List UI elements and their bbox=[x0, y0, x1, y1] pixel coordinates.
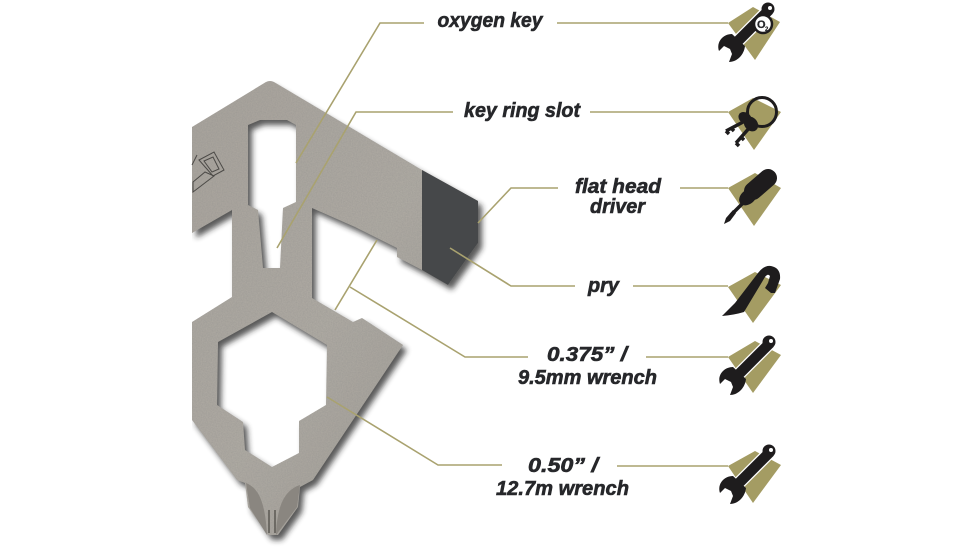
icon: 0.50 wrench bbox=[719, 444, 781, 504]
left crop mask bbox=[150, 60, 192, 460]
label: 0.50 wrench: 12.7m wrench bbox=[496, 478, 629, 500]
leader lines bbox=[277, 23, 728, 466]
icon: pry bar bbox=[722, 266, 781, 323]
icon: 0.375 wrench bbox=[719, 336, 781, 395]
icon: oxygen wrench bbox=[718, 2, 780, 62]
dark blade tip bbox=[422, 170, 478, 285]
tool body bbox=[192, 81, 478, 535]
label: pry: pry bbox=[587, 275, 620, 297]
icon: keys and ring bbox=[726, 98, 781, 150]
label: flat head driver: driver bbox=[590, 196, 646, 218]
label: 0.375 wrench: 0.375” / bbox=[547, 344, 630, 366]
icon: oxygen wrench: 2 bbox=[765, 27, 769, 33]
icon: screwdriver bbox=[724, 173, 781, 226]
label: oxygen key: oxygen key bbox=[438, 10, 543, 32]
icon: oxygen wrench: O bbox=[757, 19, 766, 31]
label: key ring slot: key ring slot bbox=[464, 100, 581, 122]
label: flat head driver: flat head bbox=[575, 176, 662, 198]
label: 0.50 wrench: 0.50” / bbox=[528, 455, 601, 477]
label: 0.375 wrench: 9.5mm wrench bbox=[518, 367, 657, 389]
logo mark bbox=[192, 152, 224, 192]
multi-tool photo bbox=[150, 60, 482, 540]
phillips tip grooves bbox=[246, 483, 300, 535]
